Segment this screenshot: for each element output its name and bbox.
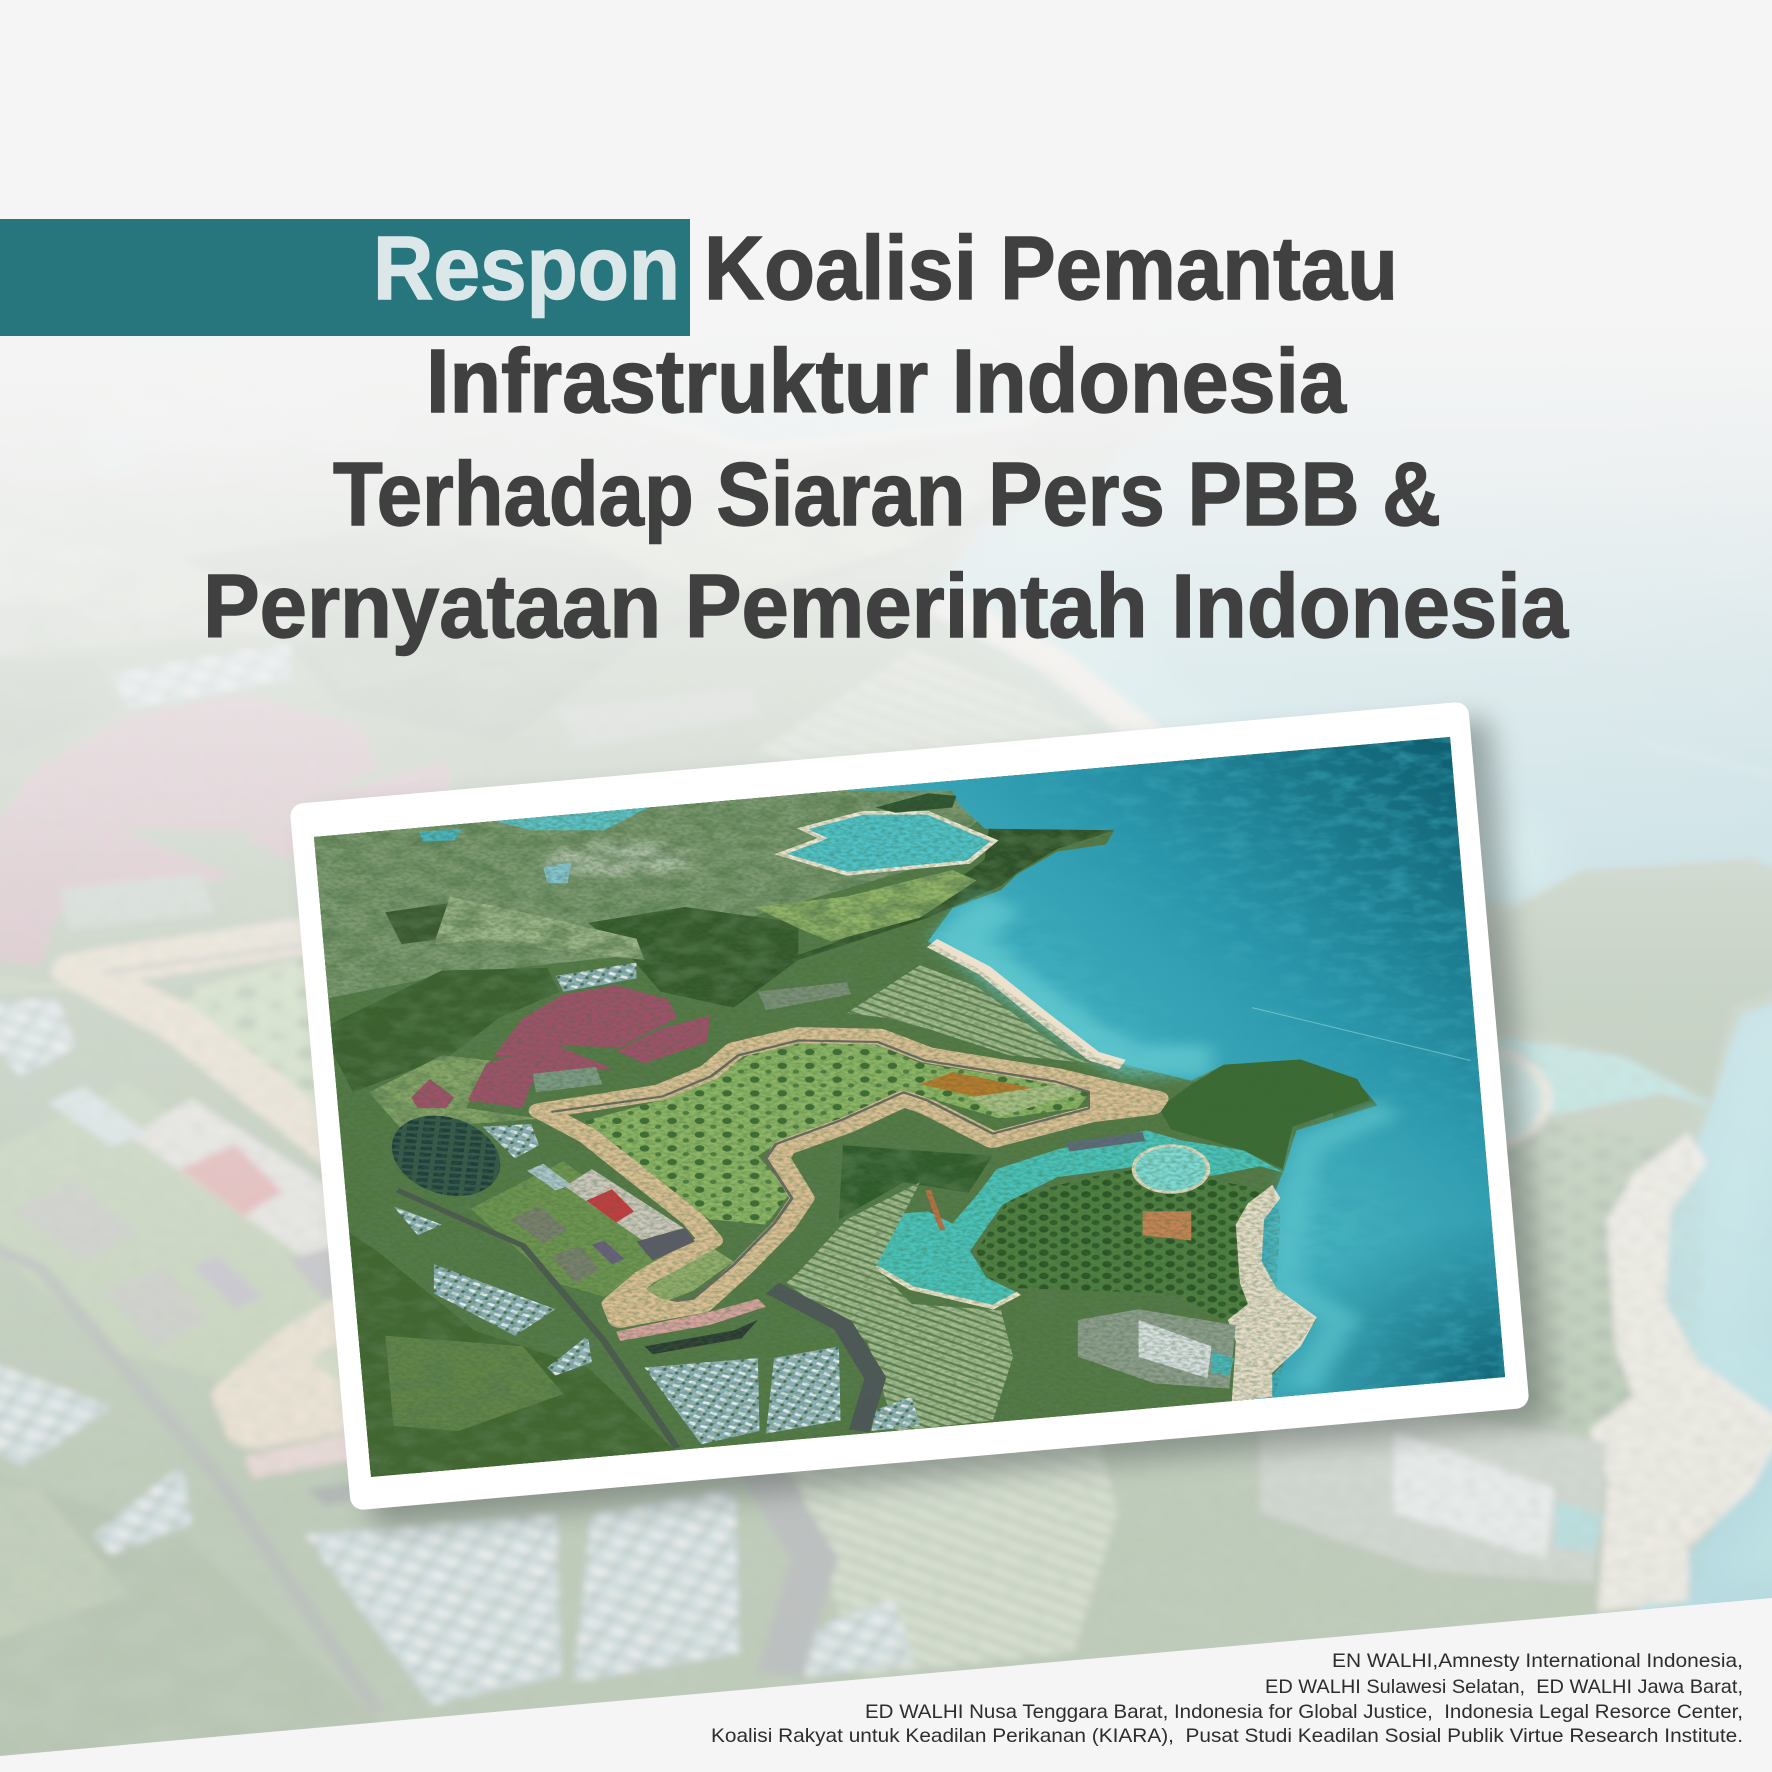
sand beach north [932, 943, 1122, 1065]
title [203, 219, 1569, 657]
solar field [370, 1103, 522, 1209]
housing block a [644, 1358, 760, 1444]
lodges behind hills [758, 982, 851, 1010]
east headland forest [1159, 1059, 1369, 1169]
housing block b [766, 1346, 841, 1434]
left slope [369, 1055, 539, 1129]
infield light strip [968, 1084, 1082, 1116]
central forest [588, 907, 798, 1008]
track hairpin runoff [608, 1283, 701, 1325]
upper-left dark patch [385, 903, 448, 944]
surf line [1252, 1008, 1471, 1061]
resort buildings [1139, 1320, 1212, 1378]
beach resort complex [1078, 1309, 1236, 1389]
card shadow [311, 718, 1552, 1527]
white photo card [289, 701, 1530, 1511]
hill terrace [533, 1067, 602, 1092]
title line 3: Terhadap Siaran Pers PBB & [333, 445, 1441, 545]
mid sea tint [960, 1008, 1550, 1473]
housing block g [871, 1397, 920, 1431]
housing block f [482, 1124, 539, 1158]
pit building [565, 1169, 695, 1261]
racing circuit [541, 1035, 1156, 1320]
lagoon jetty [928, 1190, 943, 1230]
secondary road [397, 1190, 677, 1448]
pink hill large [492, 985, 677, 1058]
aerial photo of the Mandalika circuit [280, 722, 1550, 1473]
villas above track [847, 965, 1090, 1063]
track east runoff [1090, 1084, 1167, 1116]
credit line 4: Koalisi Rakyat untuk Keadilan Perikanan (KIARA), Pusat Studi Keadilan Sosial Publik Virtue Research Institute. [711, 1725, 1743, 1747]
top island [875, 793, 956, 813]
golf course [754, 870, 977, 941]
credit line 1: EN WALHI,Amnesty International Indonesia, [1332, 1650, 1743, 1672]
marina building [1066, 1132, 1145, 1152]
land mottling [280, 722, 1333, 1473]
pit building red roof [586, 1189, 634, 1222]
pink hills [411, 985, 709, 1108]
title line 2: Infrastruktur Indonesia [426, 332, 1347, 432]
title word: Respon: Respon [373, 219, 680, 319]
plantation area [786, 1182, 1013, 1431]
housing block c [434, 1264, 555, 1336]
reef mottling [847, 722, 1550, 1473]
credit line 2: ED WALHI Sulawesi Selatan, ED WALHI Jawa Barat, [1265, 1676, 1743, 1698]
upper-left water [489, 808, 649, 830]
title line 4: Pernyataan Pemerintah Indonesia [203, 557, 1569, 657]
housing block e [555, 963, 636, 992]
housing block h [393, 1206, 442, 1235]
container rows [592, 1240, 624, 1264]
small ponds [543, 862, 572, 883]
pink hill small [411, 1079, 454, 1108]
parking lot one [511, 1206, 568, 1243]
dark forest belt [320, 968, 559, 1092]
sea [847, 722, 1550, 1473]
lower grandstand shadow [644, 1320, 758, 1354]
parking lot two [551, 1246, 600, 1283]
top bay [781, 813, 994, 874]
photo underlay [314, 737, 1505, 1477]
land base [280, 722, 1333, 1473]
housing block d [547, 1336, 592, 1375]
wave pool [1134, 1146, 1208, 1192]
sand beach south [1228, 1185, 1317, 1402]
infield forest strip [920, 1072, 1041, 1100]
teal title highlight band [0, 219, 690, 336]
track inner line [551, 1040, 1090, 1307]
hazy upper land [314, 774, 1031, 998]
hazy clouds [547, 842, 693, 876]
small upper fairway [434, 896, 644, 960]
infield [584, 1042, 1090, 1225]
shallow water along shore [960, 902, 1212, 1061]
resort pool [1212, 1352, 1234, 1375]
grandstand south [616, 1299, 766, 1341]
forest between track and lagoon [839, 1145, 993, 1219]
pit building roof [565, 1169, 685, 1245]
credits [711, 1650, 1743, 1747]
light patch in forest [385, 1336, 564, 1431]
pink hill lower [468, 1045, 612, 1108]
cliffs forest [734, 829, 1114, 1008]
villas orange roofs [1143, 1211, 1191, 1240]
lagoon [875, 1130, 1284, 1307]
far-left small lagoon [419, 829, 462, 841]
shallow water along southern shore [1284, 1108, 1390, 1389]
foliage texture [280, 722, 1333, 1473]
footer band [0, 1598, 1772, 1772]
bottom-left forest [349, 1232, 675, 1474]
service grounds [470, 1161, 685, 1299]
resort forest [977, 1169, 1297, 1330]
pink hill right [616, 1016, 709, 1063]
lagoon sand shore [875, 1267, 1019, 1307]
title line 1: Koalisi Pemantau [704, 219, 1398, 319]
pit building side wall [636, 1228, 695, 1261]
pit annex roofs [527, 1164, 572, 1190]
hairpin infield [640, 1246, 734, 1307]
credit line 3: ED WALHI Nusa Tenggara Barat, Indonesia for Global Justice, Indonesia Legal Resorce Center, [865, 1701, 1743, 1723]
main road [772, 1288, 875, 1431]
deep sea tint [1236, 1214, 1550, 1473]
